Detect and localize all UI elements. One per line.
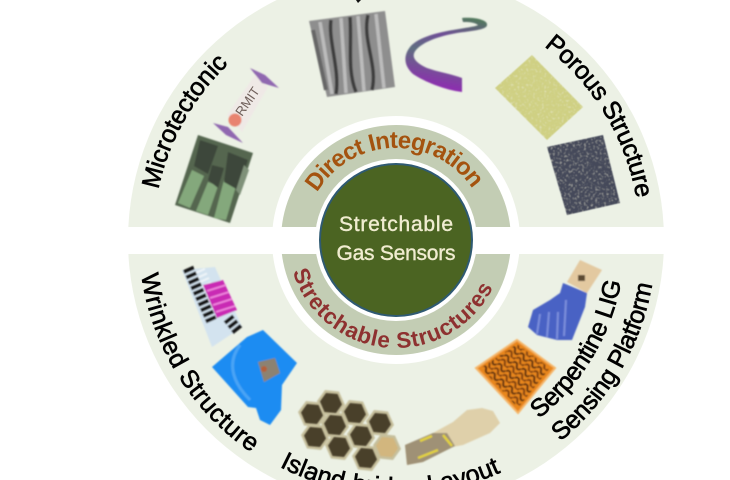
image: wrinkled stack: [182, 267, 242, 347]
image: arm with island device: [405, 408, 500, 465]
image: purple bent fibre: [405, 18, 487, 92]
label: Microtectonic: Microtectonic: [142, 56, 226, 188]
central hub circle: [320, 164, 472, 316]
label: Porous Structure: Porous Structure: [545, 34, 649, 197]
image: orange serpentine sheet: [476, 340, 555, 413]
image: yellow porous foam: [495, 55, 583, 140]
category band: [281, 125, 511, 355]
image: dark porous foam: [547, 135, 620, 215]
outer wheel ring: [128, 0, 664, 480]
heading: Stretchable Structures: Stretchable Structures: [294, 268, 492, 348]
image: blue glove with sensor: [212, 330, 297, 425]
image: RMIT stretched label: RMIT: [232, 84, 263, 119]
label: Wrinkled Structure: Wrinkled Structure: [142, 271, 256, 450]
image: blue glove fist with wrist sensor: [528, 260, 602, 340]
label: Sensing Platform: Sensing Platform: [552, 284, 652, 440]
hub title: Stretchable: [339, 213, 453, 236]
heading: Direct Integration: Direct Integration: [304, 132, 480, 192]
image: RMIT stretched label: [213, 68, 279, 143]
central white ring: [315, 159, 477, 321]
hub title: Gas Sensors: [336, 242, 456, 265]
image: honeycomb island layout: [298, 390, 401, 471]
image: green microtectonic micrograph: [175, 135, 253, 223]
label: Serpentine LIG: Serpentine LIG: [530, 280, 620, 416]
image: grey fibre micrograph: [309, 11, 395, 97]
horizontal white gap: [100, 227, 700, 254]
clipped top label descender: [356, 0, 361, 3]
inner white ring: [272, 116, 520, 364]
